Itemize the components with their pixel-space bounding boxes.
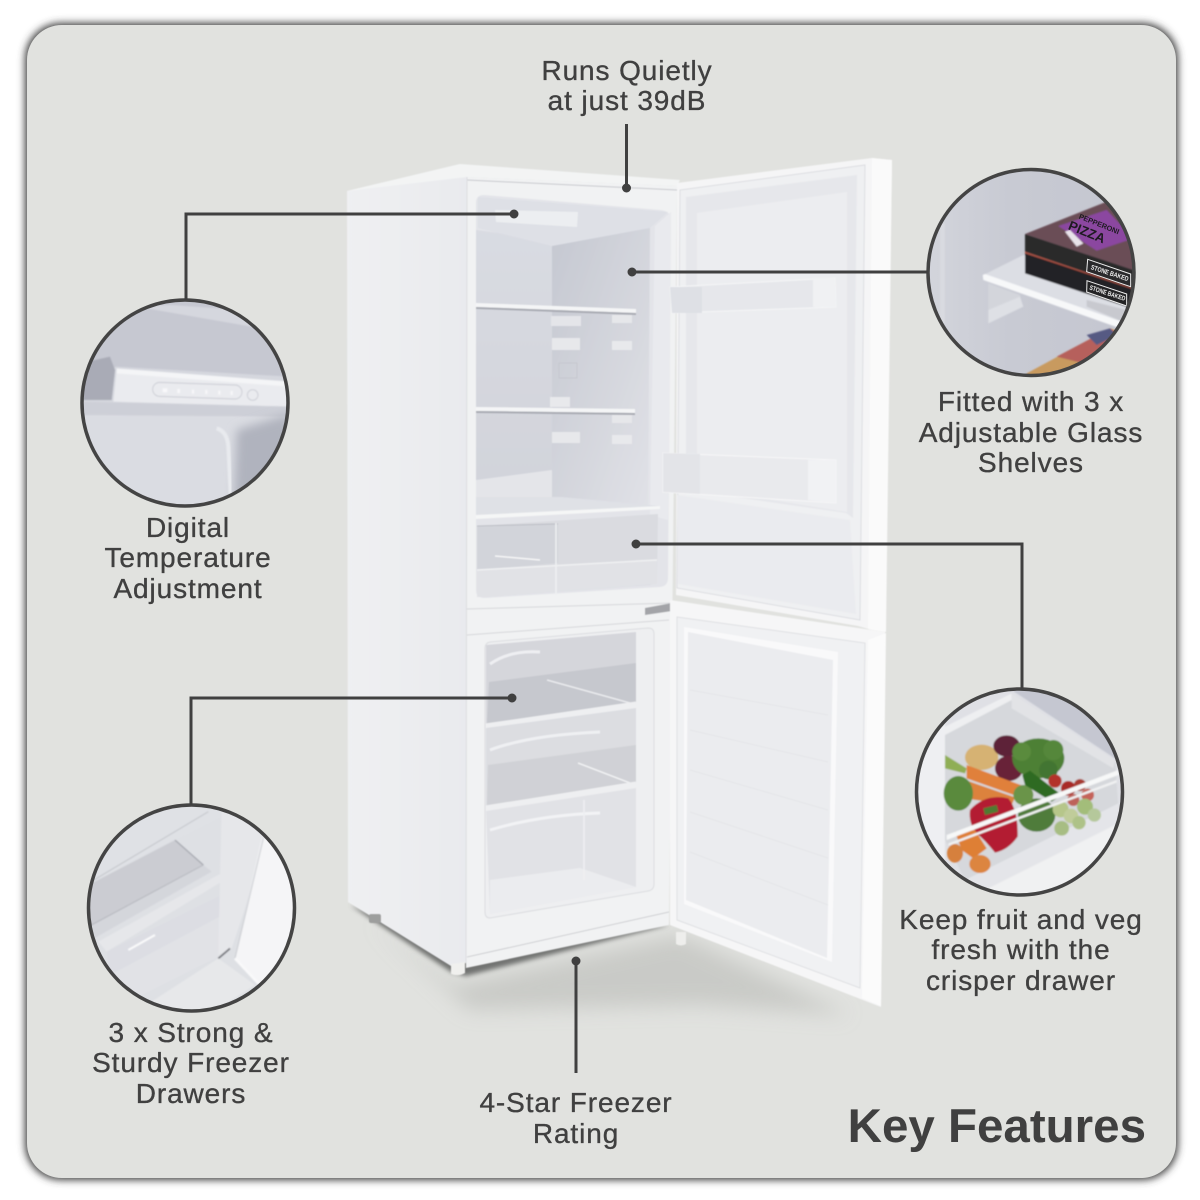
crisper drawer (477, 514, 658, 597)
temperature control panel (495, 210, 578, 227)
drawer 2 (486, 708, 636, 807)
freezer door (670, 600, 886, 1007)
door bin 2 (663, 453, 836, 503)
tomatoes (1048, 774, 1062, 788)
left wall (476, 230, 552, 515)
stone baked labels: PEPPERONI (1078, 212, 1121, 236)
leader line: freezer rating (572, 957, 580, 1073)
pizza boxes (1025, 202, 1137, 272)
glass shelf surface (983, 255, 1137, 327)
label: digital temperature adjustment: Adjustment (113, 573, 263, 604)
drawer 1 (486, 632, 636, 725)
leader line: freezer drawers (191, 694, 516, 805)
shelf 2 (476, 397, 635, 444)
title: Key Features (848, 1100, 1146, 1153)
cucumber (1022, 771, 1062, 802)
label: freezer drawers: Drawers (136, 1078, 246, 1109)
stone baked labels: PIZZA (1066, 218, 1108, 246)
kale (1012, 738, 1064, 778)
circle: adjustable glass shelf (925, 168, 1137, 380)
label: adjustable glass shelves: Adjustable Glass (919, 417, 1143, 448)
broccoli (944, 776, 973, 811)
back wall (552, 226, 650, 510)
onion (965, 745, 998, 770)
circle: freezer drawers (86, 802, 302, 1015)
label: adjustable glass shelves: Fitted with 3 x (938, 386, 1124, 417)
orange carrot ends (955, 830, 987, 858)
floor shadow (350, 905, 850, 1015)
rear foot (369, 914, 381, 923)
label: crisper drawer: crisper drawer (926, 965, 1116, 996)
door liner (686, 175, 857, 518)
fridge top face (347, 164, 680, 191)
red pepper (970, 797, 1018, 853)
label: digital temperature adjustment: Temperature (104, 542, 272, 573)
stone baked labels: STONE BAKED (1088, 285, 1126, 303)
drawer 3 (486, 788, 636, 914)
right wall (650, 212, 671, 520)
label: freezer drawers: 3 x Strong & (109, 1017, 273, 1048)
label: freezer drawers: Sturdy Freezer (92, 1047, 290, 1078)
leader line: digital temperature (186, 210, 518, 300)
leader line: crisper drawer (632, 540, 1022, 690)
red onions (993, 735, 1020, 757)
carrots (967, 765, 1023, 797)
label: crisper drawer: Keep fruit and veg (899, 904, 1143, 935)
stone baked labels: STONE BAKED (1090, 264, 1129, 283)
front foot left (451, 962, 465, 975)
fridge front frame (466, 177, 677, 968)
sprouts (1053, 801, 1069, 817)
glass shelf edges (947, 770, 1118, 840)
hinge (645, 603, 672, 615)
door bin 1 (670, 278, 836, 313)
leader line: glass shelves (628, 268, 928, 276)
leader line: runs quietly (622, 124, 630, 192)
circle: digital temperature control (80, 297, 292, 510)
label: runs quietly: Runs Quietly (541, 55, 713, 86)
ceiling (478, 197, 668, 246)
circle: crisper drawer with vegetables (914, 687, 1126, 900)
crisper cover (476, 470, 552, 497)
front foot right (676, 932, 686, 946)
fridge side panel (347, 164, 467, 966)
label: runs quietly: at just 39dB (548, 85, 706, 116)
stalks (945, 755, 967, 773)
fridge door (663, 158, 892, 632)
label: adjustable glass shelves: Shelves (978, 447, 1084, 478)
stone baked labels (1066, 212, 1131, 306)
shelf 1 (476, 303, 636, 378)
label: freezer rating: 4-Star Freezer (479, 1087, 673, 1118)
fridge compartment (476, 195, 671, 598)
fridge freezer (347, 158, 892, 1007)
label: digital temperature adjustment: Digital (146, 512, 230, 543)
freezer compartment (485, 628, 654, 918)
label: freezer rating: Rating (533, 1118, 619, 1149)
label: crisper drawer: fresh with the (931, 934, 1111, 965)
